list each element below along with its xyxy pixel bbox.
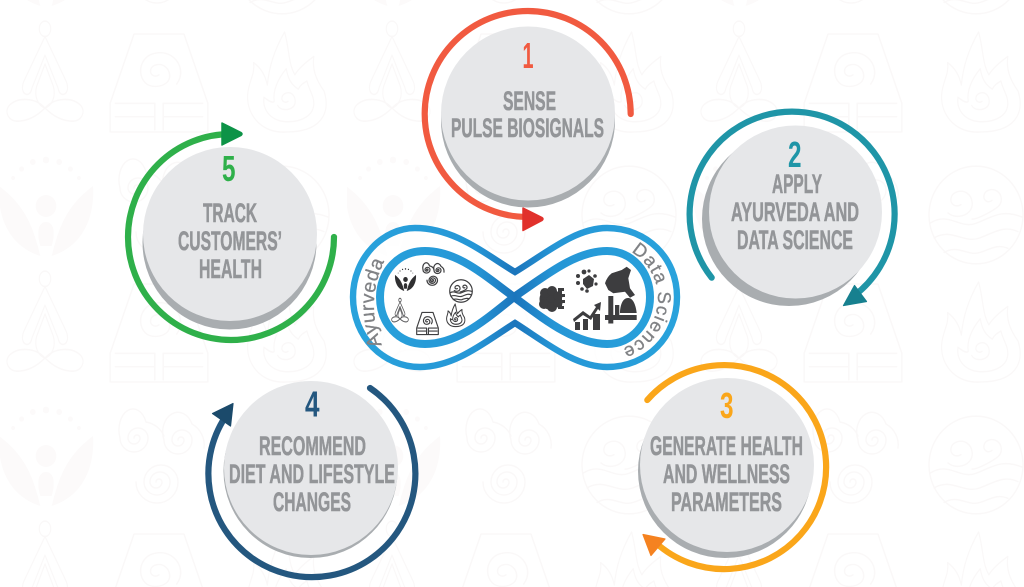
data science icons	[539, 267, 637, 330]
icon: cloud blob	[539, 286, 565, 312]
text: step 5 label	[178, 198, 282, 284]
text: step 4 label: RECOMMEND	[259, 431, 366, 461]
text: step 1 label: SENSE	[503, 86, 556, 116]
text: step 3 label: AND WELLNESS	[663, 459, 790, 489]
text: step 3 label: GENERATE HEALTH	[650, 431, 803, 461]
arrow: step 4 ring	[208, 388, 415, 577]
inner infinity band	[380, 251, 650, 344]
icon: leaves and person	[395, 268, 416, 291]
text: step 2 label: DATA SCIENCE	[737, 225, 853, 255]
arrow: step 2 ring	[690, 112, 895, 306]
step 5: track customers' health	[128, 123, 334, 340]
icon: lab equipment	[605, 296, 637, 324]
text: step 5 label: TRACK	[203, 198, 257, 228]
number 4: 4	[305, 384, 320, 424]
ayurveda icons	[392, 263, 472, 335]
text: step 5 label: HEALTH	[199, 254, 262, 284]
step 1: sense pulse biosignals	[425, 11, 631, 231]
text: step 4 label: DIET AND LIFESTYLE	[229, 459, 395, 489]
text: step 2 label	[731, 169, 859, 255]
number 5: 5	[222, 148, 236, 189]
text: step 3 label: PARAMETERS	[671, 487, 782, 517]
text: step 1 label: PULSE BIOSIGNALS	[451, 113, 604, 143]
label: ayurveda: Ayurveda	[363, 259, 384, 346]
arrow: step 3 ring	[643, 365, 826, 569]
text: step 4 label: CHANGES	[273, 487, 351, 517]
infinity symbol: ayurveda and data science	[350, 224, 680, 370]
text: step 4 label	[229, 431, 395, 517]
number 1: 1	[522, 35, 534, 76]
icon: yoga figure	[392, 298, 408, 322]
icon: fire	[447, 304, 465, 327]
icon: water	[450, 280, 472, 302]
step 3: generate health and wellness parameters	[638, 365, 826, 569]
outer infinity band	[353, 228, 677, 367]
text: step 2 label: APPLY	[772, 169, 822, 199]
text: step 3 label	[650, 431, 803, 517]
icon: earth	[417, 312, 438, 335]
icon: data splatter	[576, 269, 598, 293]
number 3: 3	[720, 385, 734, 426]
text: step 2 label: AYURVEDA AND	[731, 197, 859, 227]
label: data science: Data Science	[624, 242, 672, 356]
arrow: step 5 ring	[128, 123, 334, 340]
step 2: apply ayurveda and data science	[690, 112, 895, 306]
icon: science bell shape	[605, 267, 635, 298]
number 2: 2	[788, 134, 802, 175]
step 4: recommend diet and lifestyle changes	[208, 381, 415, 577]
arrow: step 1 ring	[425, 11, 631, 231]
icon: bar chart with arrow	[573, 302, 601, 330]
text: step 1 label	[451, 86, 604, 143]
text: step 5 label: CUSTOMERS’	[178, 226, 282, 256]
icon: air	[423, 263, 444, 285]
